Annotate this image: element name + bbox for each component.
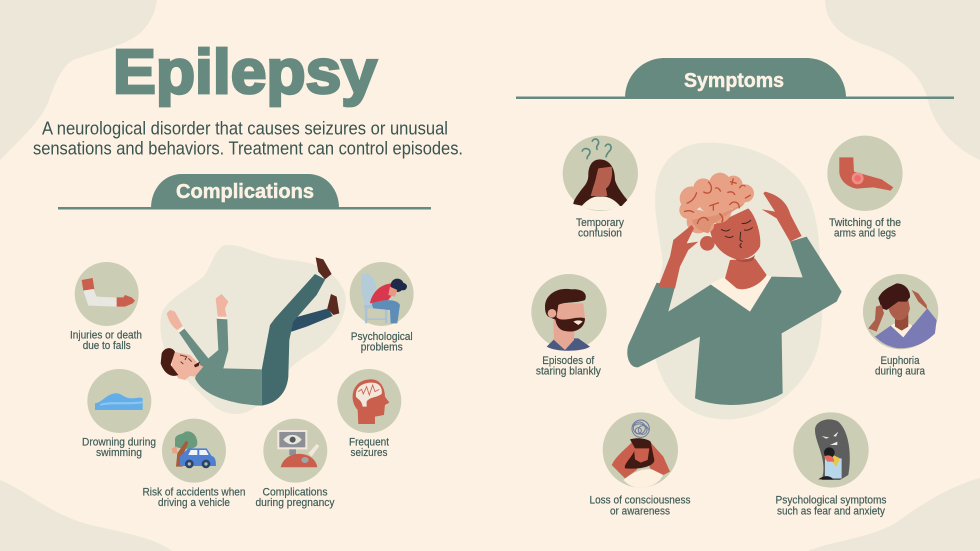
heading: complications: Complications [176, 181, 314, 203]
item: loss of consciousness [590, 412, 691, 518]
label: swimming [96, 447, 142, 459]
item: temporary confusion [563, 136, 638, 240]
label: during pregnancy [256, 497, 335, 509]
label [70, 330, 142, 352]
item: euphoria during aura [863, 274, 938, 378]
icon: car crashed into tree [162, 419, 226, 483]
subtitle: sensations and behaviors. Treatment can control episodes. [33, 138, 463, 158]
icon: woman holding head [603, 412, 678, 488]
label [351, 331, 413, 354]
icon: shadow monster over child [793, 412, 869, 488]
icon: head with brain waves [337, 369, 401, 433]
label: Injuries or death [70, 330, 142, 342]
subtitle: A neurological disorder that causes seizures or unusual [42, 118, 448, 138]
label: Risk of accidents when [142, 486, 246, 498]
label: Complications [262, 486, 328, 498]
label: problems [361, 342, 403, 354]
label: Psychological [351, 331, 413, 343]
heading: symptoms [516, 58, 954, 99]
label: during aura [875, 366, 926, 378]
item: frequent seizures [337, 369, 401, 459]
label: or awareness [610, 506, 670, 518]
label: confusion [578, 228, 622, 240]
label [776, 494, 887, 518]
label: Loss of consciousness [590, 494, 691, 506]
label: Drowning during [82, 436, 156, 448]
label [82, 436, 156, 459]
illustration: person with exposed brain [627, 143, 842, 419]
label: Temporary [576, 217, 624, 229]
label [142, 486, 246, 509]
subtitle [33, 118, 463, 158]
illustration: falling man [160, 245, 346, 414]
label: staring blankly [536, 366, 601, 378]
label [349, 436, 389, 459]
label: such as fear and anxiety [777, 506, 885, 518]
label: Twitching of the [829, 217, 901, 229]
item: injuries or death due to falls [70, 262, 142, 352]
icon: euphoric person [863, 274, 938, 349]
label: arms and legs [834, 228, 896, 240]
icon: ultrasound machine [263, 419, 327, 483]
label: Euphoria [880, 355, 920, 367]
label: Psychological symptoms [776, 494, 887, 506]
icon: bearded man [531, 274, 607, 351]
label [875, 355, 926, 378]
item: episodes of staring blankly [531, 274, 607, 378]
label [256, 486, 335, 509]
label: seizures [350, 447, 388, 459]
item: twitching of arms and legs [827, 136, 903, 240]
label: driving a vehicle [158, 497, 230, 509]
title: Epilepsy [113, 38, 378, 107]
heading: symptoms: Symptoms [684, 70, 784, 92]
item: risk of accidents [142, 419, 246, 509]
label [536, 355, 601, 378]
icon: twitching arm [827, 136, 903, 211]
label: Episodes of [542, 355, 595, 367]
label [576, 217, 624, 240]
label: Frequent [349, 436, 389, 448]
icon: confused woman [563, 136, 638, 211]
label [590, 494, 691, 518]
item: drowning during swimming [82, 369, 156, 459]
item: psychological problems [350, 262, 414, 354]
item: psychological symptoms [776, 412, 887, 518]
icon: water waves [87, 369, 151, 433]
icon: person bent on chair [350, 262, 414, 326]
heading: complications [58, 174, 431, 210]
label: due to falls [83, 340, 131, 352]
item: complications during pregnancy [256, 419, 335, 509]
icon: bandaged arm [75, 262, 139, 326]
label [829, 217, 901, 240]
